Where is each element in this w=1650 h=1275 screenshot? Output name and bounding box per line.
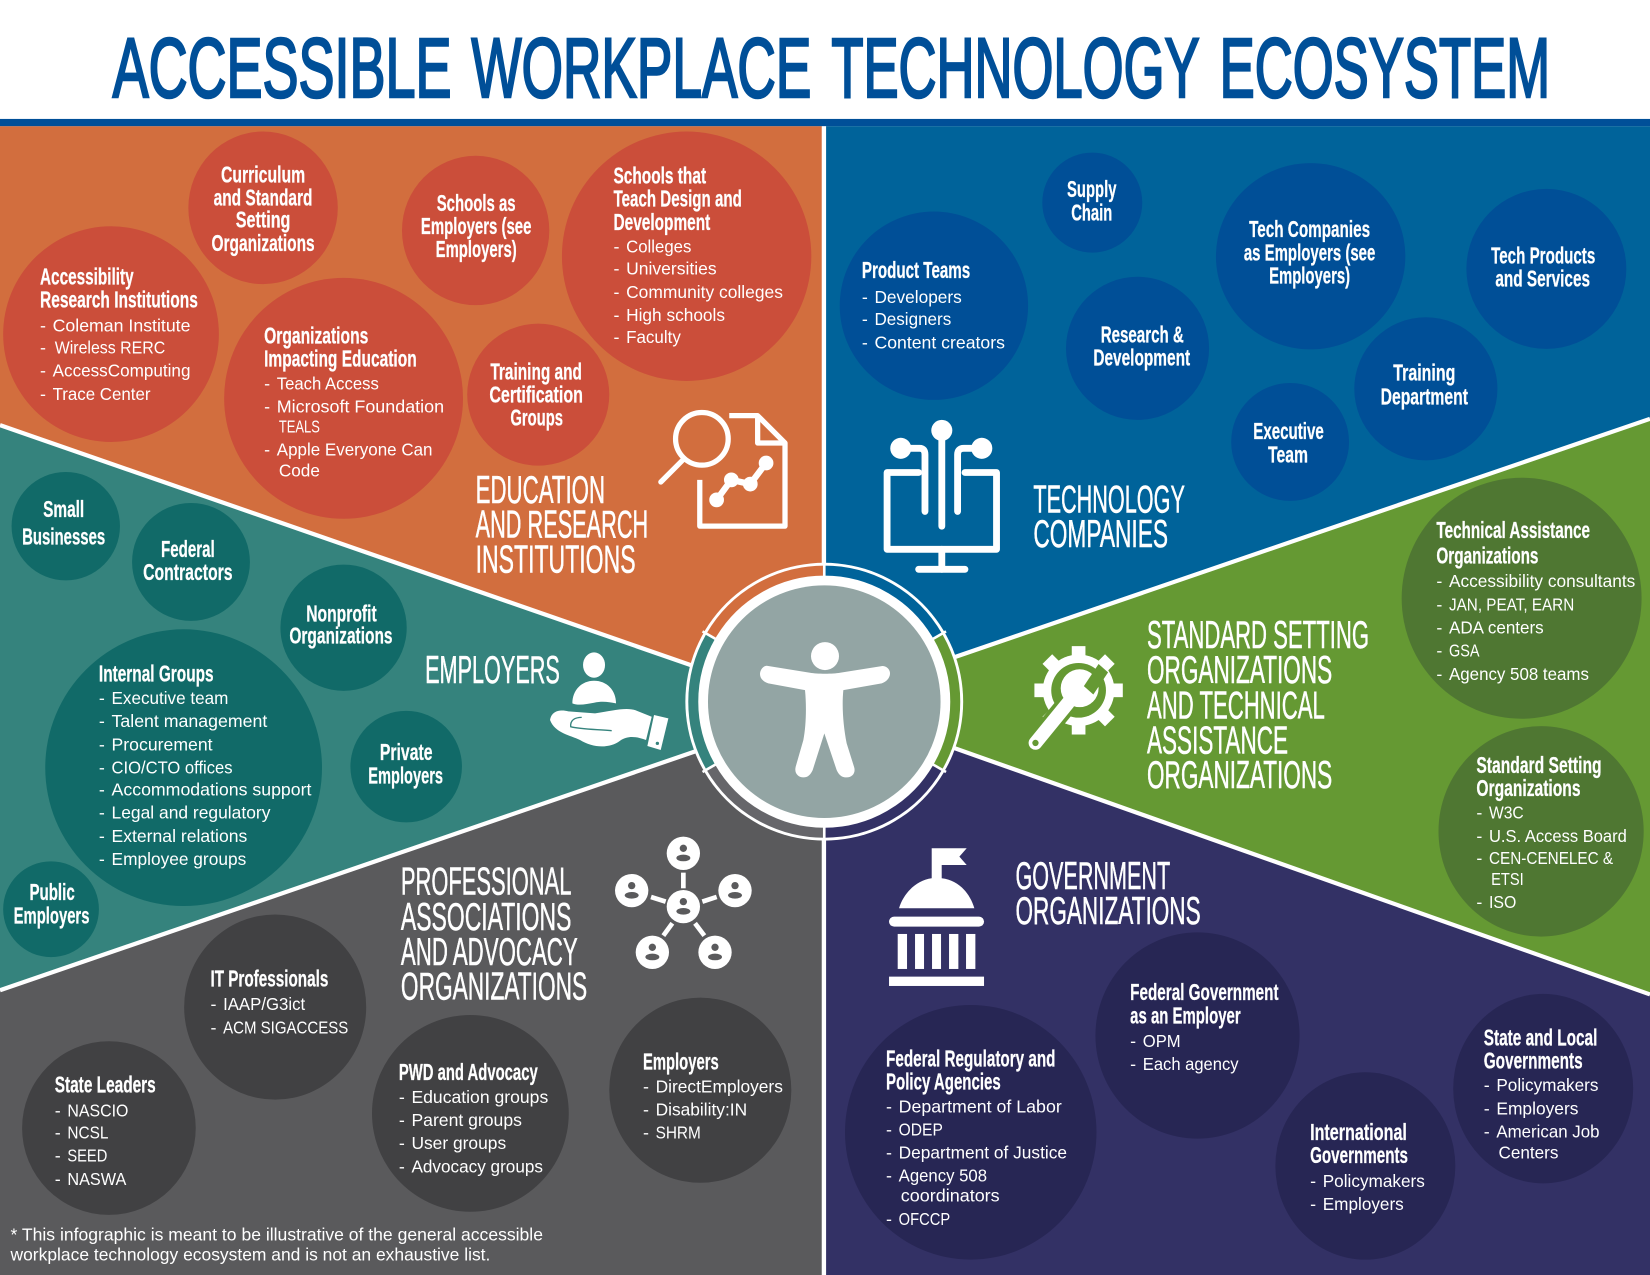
heading: technology companies: COMPANIES (1033, 513, 1168, 556)
circle: state and local governments: - (1484, 1122, 1490, 1142)
circle: technical assistance organizations: - (1436, 594, 1442, 614)
heading: professional associations and advocacy organizations: AND ADVOCACY (401, 931, 578, 974)
circle: nonprofit organizations (280, 565, 407, 691)
icon: accessibility person (760, 642, 890, 777)
circle: schools as employers: Schools as (437, 190, 516, 216)
circle: product teams: - (862, 287, 868, 307)
circle: tech companies as employers: Tech Companies (1249, 216, 1370, 242)
panel: education and research institutions (0, 126, 822, 711)
circle: state and local governments: Centers (1498, 1143, 1559, 1163)
circle: product teams: - (862, 309, 868, 329)
circle: pwd and advocacy: Advocacy groups (411, 1156, 543, 1176)
circle: organizations impacting education: Code (279, 461, 320, 481)
circle: schools that teach design and development: High schools (626, 305, 725, 325)
circle: state and local governments: - (1484, 1075, 1490, 1095)
circle: state leaders: - (55, 1146, 61, 1166)
title: TECHNOLOGY (831, 21, 1200, 115)
circle: training and certification groups: Certification (489, 381, 583, 407)
circle: standard setting organizations: ISO (1489, 892, 1516, 912)
heading: standard setting organizations and technical assistance organizations (1147, 614, 1369, 797)
circle: pwd and advocacy: User groups (411, 1133, 506, 1153)
circle: state leaders: NASWA (67, 1169, 126, 1189)
circle: curriculum and standard setting organizations: and Standard (214, 185, 313, 211)
circle: organizations impacting education: - (264, 373, 270, 393)
circle: accessibility research institutions: - (40, 315, 46, 335)
circle: state leaders: - (55, 1101, 61, 1121)
circle: private employers: Employers (368, 762, 443, 788)
title (113, 21, 1550, 115)
circle: organizations impacting education: - (264, 440, 270, 460)
circle: standard setting organizations: - (1476, 848, 1482, 868)
heading: standard setting organizations and technical assistance organizations: STANDARD SETTING (1147, 614, 1369, 657)
icon: network of people (615, 837, 752, 969)
circle: small businesses: Small (43, 496, 84, 522)
circle: internal groups: - (99, 849, 105, 869)
heading: employers: EMPLOYERS (425, 649, 560, 692)
circle: internal groups: Talent management (112, 711, 267, 731)
circle: state leaders: NASCIO (67, 1101, 128, 1121)
heading: professional associations and advocacy organizations: PROFESSIONAL (401, 860, 571, 903)
circle: organizations impacting education: TEALS (279, 417, 320, 437)
circle: employers associations: Disability:IN (656, 1099, 747, 1119)
heading: education and research institutions: AND RESEARCH (476, 504, 648, 547)
circle: employers associations (609, 998, 791, 1183)
title: WORKPLACE (471, 21, 811, 115)
circle: nonprofit organizations: Organizations (289, 622, 393, 648)
circle: state leaders (22, 1041, 196, 1215)
circle: pwd and advocacy: - (399, 1087, 405, 1107)
circle: employers associations: DirectEmployers (656, 1076, 783, 1096)
footnote: * This infographic is meant to be illustrative of the general accessible (11, 1225, 543, 1245)
circle: state and local governments: Employers (1496, 1098, 1579, 1118)
circle: internal groups: Accommodations support (112, 780, 312, 800)
circle: product teams: Developers (874, 287, 962, 307)
circle: accessibility research institutions: Research Institutions (40, 287, 198, 313)
circle: federal regulatory and policy agencies: Agency 508 (899, 1166, 987, 1186)
heading: standard setting organizations and technical assistance organizations: ORGANIZATIONS (1147, 754, 1332, 797)
circle: federal regulatory and policy agencies: - (886, 1209, 892, 1229)
circle: accessibility research institutions: Trace Center (53, 384, 151, 404)
circle: it professionals: IAAP/G3ict (223, 994, 305, 1014)
circle: technical assistance organizations: Accessibility consultants (1449, 571, 1635, 591)
circle: organizations impacting education: Microsoft Foundation (277, 397, 444, 417)
circle: supply chain: Chain (1071, 199, 1112, 225)
circle: standard setting organizations: - (1476, 826, 1482, 846)
circle: internal groups: Internal Groups (99, 660, 214, 686)
circle: schools that teach design and development: Teach Design and (613, 186, 742, 212)
circle: small businesses (12, 472, 120, 580)
circle: executive team (1231, 383, 1349, 501)
heading: technology companies: TECHNOLOGY (1033, 478, 1185, 521)
circle: internal groups: - (99, 734, 105, 754)
circle: technical assistance organizations: Agency 508 teams (1449, 664, 1589, 684)
circle: public employers: Public (29, 879, 75, 905)
icon: person held in open hand (550, 652, 668, 750)
circle: training department (1354, 317, 1497, 460)
circle: international governments: International (1310, 1119, 1407, 1145)
heading: standard setting organizations and technical assistance organizations: ASSISTANCE (1147, 719, 1288, 762)
circle: supply chain: Supply (1067, 176, 1117, 202)
circle: federal government as an employer: as an Employer (1130, 1002, 1241, 1028)
circle: tech products and services (1466, 189, 1626, 349)
circle: federal regulatory and policy agencies: - (886, 1096, 892, 1116)
circle: technical assistance organizations: - (1436, 618, 1442, 638)
circle: organizations impacting education: Organizations (264, 322, 368, 348)
circle: federal contractors (132, 503, 250, 621)
circle: supply chain (1042, 153, 1142, 253)
circle: training and certification groups: Training and (490, 358, 582, 384)
circle: curriculum and standard setting organizations: Organizations (212, 230, 315, 256)
circle: organizations impacting education: Apple Everyone Can (277, 440, 432, 460)
circle: technical assistance organizations: ADA centers (1449, 618, 1544, 638)
circle: public employers: Employers (14, 902, 89, 928)
heading: standard setting organizations and technical assistance organizations: ORGANIZATIONS (1147, 649, 1332, 692)
circle: technical assistance organizations: JAN, PEAT, EARN (1449, 594, 1574, 614)
circle: executive team: Executive (1253, 418, 1324, 444)
circle: state and local governments: American Job (1496, 1122, 1600, 1142)
circle: state and local governments: State and Local (1484, 1024, 1597, 1050)
circle: small businesses: Businesses (22, 523, 105, 549)
circle: federal government as an employer: Each agency (1143, 1054, 1239, 1074)
circle: schools that teach design and development: Community colleges (626, 282, 783, 302)
heading: education and research institutions (476, 469, 648, 581)
circle: nonprofit organizations: Nonprofit (306, 600, 377, 626)
circle: internal groups: - (99, 803, 105, 823)
heading: education and research institutions: EDUCATION (476, 469, 605, 512)
circle: accessibility research institutions (3, 226, 219, 442)
circle: training and certification groups (467, 324, 609, 466)
circle: accessibility research institutions: - (40, 384, 46, 404)
circle: federal regulatory and policy agencies: ODEP (899, 1119, 943, 1139)
central hub with accessibility figure (685, 560, 963, 844)
heading: government organizations (1015, 855, 1201, 933)
footnote (10, 1225, 543, 1265)
circle: schools that teach design and development (562, 132, 811, 381)
circle: standard setting organizations: U.S. Access Board (1489, 826, 1627, 846)
circle: it professionals: - (210, 1017, 216, 1037)
panel: government organizations (826, 702, 1650, 1275)
title: ACCESSIBLE (113, 21, 451, 115)
circle: internal groups: - (99, 826, 105, 846)
circle: standard setting organizations: - (1476, 803, 1482, 823)
circle: pwd and advocacy: PWD and Advocacy (399, 1059, 538, 1085)
circle: private employers: Private (380, 739, 433, 765)
circle: federal regulatory and policy agencies: coordinators (901, 1186, 1000, 1206)
circle: state leaders: State Leaders (55, 1072, 156, 1098)
circle: internal groups: - (99, 688, 105, 708)
circle: internal groups: Legal and regulatory (112, 803, 270, 823)
circle: tech companies as employers: as Employers (see (1244, 239, 1375, 265)
heading: education and research institutions: INSTITUTIONS (476, 538, 636, 581)
circle: state leaders: - (55, 1169, 61, 1189)
icon: gear and wrench (1032, 646, 1123, 746)
circle: organizations impacting education (224, 278, 463, 519)
circle: curriculum and standard setting organizations: Setting (236, 207, 290, 233)
circle: schools that teach design and development: - (613, 237, 619, 257)
circle: internal groups: Procurement (112, 734, 213, 754)
circle: employers associations: Employers (643, 1049, 719, 1075)
circle: private employers (350, 711, 462, 822)
circle: standard setting organizations: ETSI (1491, 869, 1524, 889)
circle: accessibility research institutions: - (40, 338, 46, 358)
circle: it professionals (184, 914, 366, 1100)
circle: internal groups: Executive team (112, 688, 228, 708)
heading: technology companies (1033, 478, 1185, 556)
circle: internal groups: - (99, 711, 105, 731)
icon: monitor with circuit nodes (887, 420, 997, 569)
circle: schools that teach design and development: Development (613, 209, 710, 235)
circle: organizations impacting education: Teach Access (277, 373, 379, 393)
circle: state leaders: SEED (67, 1146, 107, 1166)
circle: standard setting organizations: - (1476, 892, 1482, 912)
circle: federal regulatory and policy agencies: Federal Regulatory and (886, 1045, 1055, 1071)
circle: schools that teach design and development: - (613, 259, 619, 279)
circle: product teams: Content creators (874, 332, 1005, 352)
footnote: workplace technology ecosystem and is not an exhaustive list. (10, 1245, 490, 1265)
circle: product teams: - (862, 332, 868, 352)
circle: standard setting organizations: W3C (1489, 803, 1524, 823)
circle: accessibility research institutions: Accessibility (40, 264, 134, 290)
circle: accessibility research institutions: AccessComputing (53, 361, 190, 381)
circle: federal regulatory and policy agencies: - (886, 1119, 892, 1139)
circle: international governments: Governments (1310, 1142, 1408, 1168)
circle: international governments: - (1310, 1194, 1316, 1214)
heading: standard setting organizations and technical assistance organizations: AND TECHNICAL (1147, 685, 1325, 728)
circle: internal groups: CIO/CTO offices (112, 757, 233, 777)
circle: technical assistance organizations: - (1436, 664, 1442, 684)
circle: schools as employers: Employers) (436, 236, 517, 262)
circle: schools that teach design and development: - (613, 305, 619, 325)
circle: federal government as an employer: OPM (1143, 1031, 1181, 1051)
circle: curriculum and standard setting organizations: Curriculum (221, 161, 305, 187)
circle: federal government as an employer: - (1130, 1031, 1136, 1051)
circle: training and certification groups: Groups (510, 405, 563, 431)
circle: state and local governments: - (1484, 1098, 1490, 1118)
circle: pwd and advocacy: - (399, 1110, 405, 1130)
circle: research and development: Research & (1101, 321, 1184, 347)
circle: pwd and advocacy: Parent groups (411, 1110, 522, 1130)
circle: tech companies as employers: Employers) (1269, 263, 1350, 289)
circle: technical assistance organizations: - (1436, 571, 1442, 591)
circle: internal groups: - (99, 780, 105, 800)
circle: public employers (3, 861, 99, 957)
circle: federal contractors: Federal (161, 536, 215, 562)
circle: accessibility research institutions: Coleman Institute (53, 315, 191, 335)
panel: standard setting and technical assistance (826, 419, 1650, 994)
circle: international governments (1275, 1072, 1455, 1260)
circle: training department: Department (1381, 384, 1468, 410)
circle: federal regulatory and policy agencies: - (886, 1166, 892, 1186)
circle: it professionals: IT Professionals (210, 965, 328, 991)
circle: federal regulatory and policy agencies: Policy Agencies (886, 1069, 1001, 1095)
heading: professional associations and advocacy organizations (401, 860, 587, 1009)
circle: schools that teach design and development: - (613, 327, 619, 347)
circle: federal regulatory and policy agencies (845, 1005, 1096, 1260)
heading: government organizations: GOVERNMENT (1015, 855, 1170, 898)
circle: employers associations: - (643, 1099, 649, 1119)
circle: standard setting organizations: Organizations (1476, 775, 1581, 801)
circle: schools as employers (402, 156, 549, 305)
circle: tech products and services: Tech Products (1491, 243, 1595, 269)
circle: organizations impacting education: Impacting Education (264, 346, 417, 372)
circle: accessibility research institutions: Wireless RERC (55, 338, 165, 358)
circle: state and local governments: Policymakers (1496, 1075, 1598, 1095)
heading: government organizations: ORGANIZATIONS (1015, 890, 1201, 933)
circle: employers associations: SHRM (656, 1123, 701, 1143)
circle: employers associations: - (643, 1123, 649, 1143)
circle: international governments: Policymakers (1323, 1171, 1425, 1191)
circle: state and local governments (1453, 994, 1633, 1183)
circle: state and local governments: Governments (1484, 1048, 1583, 1074)
circle: standard setting organizations (1438, 726, 1644, 937)
circle: federal regulatory and policy agencies: Department of Justice (899, 1143, 1067, 1163)
circle: federal regulatory and policy agencies: - (886, 1143, 892, 1163)
circle: international governments: Employers (1323, 1194, 1404, 1214)
circle: training department: Training (1393, 359, 1455, 385)
circle: tech products and services: and Services (1495, 266, 1590, 292)
circle: technical assistance organizations: GSA (1449, 641, 1480, 661)
circle: employers associations: - (643, 1076, 649, 1096)
circle: federal contractors: Contractors (143, 559, 233, 585)
circle: standard setting organizations: CEN-CENELEC & (1489, 848, 1613, 868)
circle: tech companies as employers (1216, 163, 1405, 349)
heading: professional associations and advocacy organizations: ASSOCIATIONS (401, 896, 571, 939)
circle: curriculum and standard setting organizations (188, 132, 338, 284)
title rule (0, 119, 1650, 126)
circle: executive team: Team (1268, 441, 1308, 467)
panel: technology companies (826, 126, 1650, 701)
circle: international governments: - (1310, 1171, 1316, 1191)
circle: schools that teach design and development: - (613, 282, 619, 302)
circle: pwd and advocacy: - (399, 1156, 405, 1176)
panel: professional associations and advocacy organizations (0, 708, 822, 1275)
circle: state leaders: NCSL (67, 1123, 108, 1143)
circle: federal government as an employer: Federal Government (1130, 979, 1279, 1005)
circle: internal groups: - (99, 757, 105, 777)
circle: state leaders: - (55, 1123, 61, 1143)
circle: internal groups: Employee groups (112, 849, 246, 869)
circle: schools that teach design and development: Schools that (613, 163, 706, 189)
circle: product teams: Designers (874, 309, 951, 329)
circle: technical assistance organizations: Organizations (1436, 542, 1538, 568)
circle: internal groups (45, 629, 322, 906)
icon: capitol building (889, 848, 984, 986)
circle: research and development: Development (1093, 345, 1190, 371)
circle: technical assistance organizations (1402, 478, 1642, 719)
circle: internal groups: External relations (112, 826, 247, 846)
circle: pwd and advocacy: - (399, 1133, 405, 1153)
circle: it professionals: - (210, 994, 216, 1014)
circle: technical assistance organizations: - (1436, 641, 1442, 661)
circle: accessibility research institutions: - (40, 361, 46, 381)
circle: federal government as an employer: - (1130, 1054, 1136, 1074)
circle: product teams: Product Teams (862, 257, 970, 283)
heading: professional associations and advocacy organizations: ORGANIZATIONS (401, 966, 587, 1009)
circle: schools that teach design and development: Colleges (626, 237, 691, 257)
circle: pwd and advocacy: Education groups (411, 1087, 548, 1107)
icon: magnifier over document chart (661, 413, 785, 526)
circle: federal regulatory and policy agencies: Department of Labor (899, 1096, 1062, 1116)
circle: pwd and advocacy (372, 1015, 569, 1212)
circle: schools that teach design and development: Universities (626, 259, 717, 279)
circle: schools as employers: Employers (see (421, 213, 531, 239)
circle: product teams (840, 212, 1028, 400)
circle: organizations impacting education: - (264, 397, 270, 417)
circle: it professionals: ACM SIGACCESS (223, 1017, 348, 1037)
circle: federal government as an employer (1095, 932, 1300, 1139)
panel: employers (0, 425, 822, 990)
circle: federal regulatory and policy agencies: OFCCP (899, 1209, 950, 1229)
circle: schools that teach design and development: Faculty (626, 327, 681, 347)
circle: research and development (1066, 277, 1209, 420)
